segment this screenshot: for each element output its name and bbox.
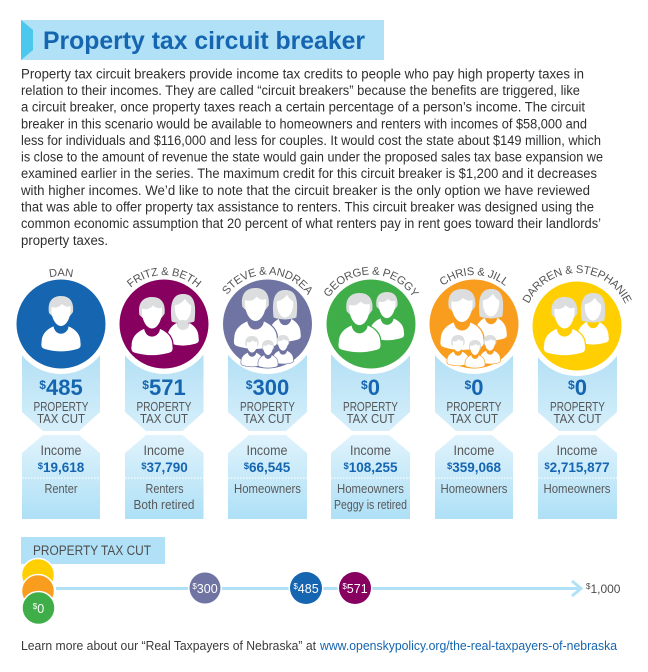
tax cut: Steve and Andrea: TAX CUT: [244, 412, 292, 426]
column: Steve and Andrea: [222, 266, 312, 519]
scale end label: $: [586, 582, 591, 591]
tax cut: Steve and Andrea: 300: [252, 375, 289, 400]
marker: $571: $: [342, 582, 347, 591]
intro paragraph: Property tax circuit breakers provide income tax credits to people who pay high property taxes in: [21, 66, 584, 82]
scale arrow: [56, 581, 581, 596]
tax cut: Fritz and Beth: $: [142, 378, 149, 392]
column: Darren and Stephanie: [522, 265, 632, 519]
avatar: Chris and Jill: [430, 280, 518, 368]
income: George and Peggy: Homeowners: [337, 482, 404, 496]
marker: $571: [338, 570, 372, 606]
tax cut: Dan: $: [39, 378, 46, 392]
income: Dan: $: [38, 461, 44, 472]
tax cut: George and Peggy: [343, 375, 399, 426]
intro paragraph: property taxes.: [21, 233, 108, 248]
income: Steve and Andrea: Income: [246, 443, 288, 458]
tax cut: Dan: PROPERTY: [34, 400, 89, 414]
intro paragraph: examined earlier in the series. The maximum credit for this circuit breaker is $1,200 and it decreases: [21, 166, 597, 181]
avatar: Dan: [16, 280, 106, 368]
name: George and Peggy: GEORGE & PEGGY: [324, 266, 420, 296]
marker: $0 orange: [22, 574, 54, 608]
marker: $485: 485: [298, 582, 319, 596]
income: Fritz and Beth: Both retired: [134, 498, 195, 512]
income: Darren and Stephanie: Homeowners: [544, 482, 610, 496]
column: Chris and Jill: [430, 267, 518, 519]
tax cut: Chris and Jill: $: [465, 378, 472, 392]
name: Chris and Jill: CHRIS & JILL: [440, 267, 506, 286]
name: Fritz and Beth: FRITZ & BETH: [126, 267, 202, 288]
tax cut: Darren and Stephanie: [550, 375, 606, 426]
income: Fritz and Beth: Income: [144, 443, 184, 458]
income: Steve and Andrea: 66,545: [249, 460, 291, 475]
income: Fritz and Beth: [134, 443, 195, 512]
tax cut: Darren and Stephanie: 0: [575, 375, 587, 400]
intro paragraph: breaker in this scenario would be available to homeowners and renters with incomes of $58,000 and: [21, 116, 587, 131]
avatar: Steve and Andrea: [223, 280, 312, 368]
income: Darren and Stephanie: 2,715,877: [550, 460, 610, 475]
income: Fritz and Beth: $: [141, 461, 147, 472]
intro paragraph: common economic assumption that 20 percent of what renters pay in rent goes toward their landlords’: [21, 216, 601, 231]
footer link line: www.openskypolicy.org/the-real-taxpayers-of-nebraska: [319, 638, 618, 653]
tax cut: Chris and Jill: 0: [471, 375, 483, 400]
income: Dan: Renter: [44, 482, 78, 496]
marker: $300: [188, 571, 222, 605]
tax cut: George and Peggy: 0: [368, 375, 380, 400]
tax cut: George and Peggy: TAX CUT: [346, 412, 395, 426]
title banner: [21, 20, 384, 60]
avatar: Fritz and Beth: [120, 280, 208, 368]
name: Darren and Stephanie: DARREN & STEPHANIE: [522, 265, 632, 304]
marker: $0 green: $: [33, 602, 38, 611]
banner notch: [21, 20, 33, 60]
income: Darren and Stephanie: $: [544, 461, 550, 472]
marker: $485: [288, 570, 324, 606]
income: Chris and Jill: Homeowners: [440, 482, 508, 496]
tax cut: Dan: [34, 375, 89, 426]
marker: $571: 571: [347, 582, 368, 596]
intro paragraph: [20, 66, 603, 248]
name: Dan: DAN: [49, 268, 73, 278]
tax cut: Steve and Andrea: $: [246, 378, 253, 392]
income: Steve and Andrea: [234, 443, 301, 496]
tax cut: George and Peggy: PROPERTY: [343, 400, 399, 414]
marker: $485: $: [293, 582, 298, 591]
tax cut: Dan: 485: [46, 375, 83, 400]
income: Chris and Jill: $: [447, 461, 453, 472]
marker: $300: 300: [197, 582, 218, 596]
tax cut: Chris and Jill: TAX CUT: [450, 412, 498, 426]
intro paragraph: less for individuals and $116,000 and less for couples. It would cost the state about $149 million, which: [21, 133, 601, 148]
tax cut: Fritz and Beth: 571: [149, 375, 186, 400]
tax cut: Darren and Stephanie: TAX CUT: [554, 412, 602, 426]
income: Steve and Andrea: $: [244, 461, 250, 472]
column: Dan: [16, 268, 106, 519]
income: Dan: 19,618: [43, 460, 85, 475]
tax cut: George and Peggy: $: [361, 378, 368, 392]
title: Property tax circuit breaker: [43, 27, 365, 55]
income: George and Peggy: 108,255: [349, 460, 398, 475]
marker: $0 green: 0: [37, 602, 44, 616]
income: Darren and Stephanie: [544, 443, 610, 496]
scale heading: [21, 537, 165, 564]
marker: $0 yellow: [22, 558, 54, 592]
income: Dan: Income: [40, 443, 82, 458]
income: Chris and Jill: 359,068: [452, 460, 502, 475]
income: Chris and Jill: [440, 443, 508, 496]
marker: $300: $: [192, 582, 197, 591]
tax cut: Steve and Andrea: PROPERTY: [240, 400, 296, 414]
avatar: Darren and Stephanie: [532, 282, 622, 370]
footer link line: [21, 638, 618, 653]
income: George and Peggy: Income: [350, 443, 391, 458]
tax cut: Fritz and Beth: TAX CUT: [140, 412, 188, 426]
income: Darren and Stephanie: Income: [556, 443, 598, 458]
income: Steve and Andrea: Homeowners: [234, 482, 301, 496]
income: Chris and Jill: Income: [454, 443, 494, 458]
intro paragraph: that was able to offer property tax assistance to renters. This circuit breaker was designed using the: [21, 200, 594, 214]
income: Fritz and Beth: Renters: [146, 482, 184, 496]
footer link line: Learn more about our “Real Taxpayers of Nebraska” at: [21, 638, 316, 653]
tax cut: Darren and Stephanie: PROPERTY: [550, 400, 606, 414]
income: Dan: [38, 443, 85, 496]
scale heading: PROPERTY TAX CUT: [33, 543, 151, 558]
column: Fritz and Beth: [120, 267, 208, 519]
marker: $0 green: [22, 592, 55, 624]
tax cut: Darren and Stephanie: $: [568, 378, 575, 392]
income: George and Peggy: [334, 443, 407, 512]
tax cut: Fritz and Beth: PROPERTY: [136, 400, 192, 414]
intro paragraph: is close to the amount of revenue the state would gain under the proposed sales tax base expansion we: [21, 150, 603, 165]
tax cut: Fritz and Beth: [136, 375, 192, 426]
scale end label: 1,000: [590, 582, 621, 596]
intro paragraph: a circuit breaker, once property taxes reach a certain percentage of a person’s income. The circuit: [21, 100, 585, 115]
intro paragraph: relation to their incomes. They are called “circuit breakers” because the benefits are triggered, like: [21, 83, 580, 98]
income: Fritz and Beth: 37,790: [146, 460, 188, 475]
income: George and Peggy: Peggy is retired: [334, 498, 407, 512]
column: George and Peggy: [324, 266, 420, 519]
income: George and Peggy: $: [343, 461, 349, 472]
name: Steve and Andrea: STEVE & ANDREA: [222, 266, 312, 296]
avatar: George and Peggy: [326, 280, 416, 368]
tax cut: Steve and Andrea: [240, 375, 296, 426]
tax cut: Dan: TAX CUT: [37, 412, 85, 426]
tax cut scale: [22, 558, 621, 624]
tax cut: Chris and Jill: [446, 375, 502, 426]
intro paragraph: with higher incomes. We’d like to note that the circuit breaker is the only option we have reviewed: [20, 183, 590, 198]
tax cut: Chris and Jill: PROPERTY: [446, 400, 502, 414]
